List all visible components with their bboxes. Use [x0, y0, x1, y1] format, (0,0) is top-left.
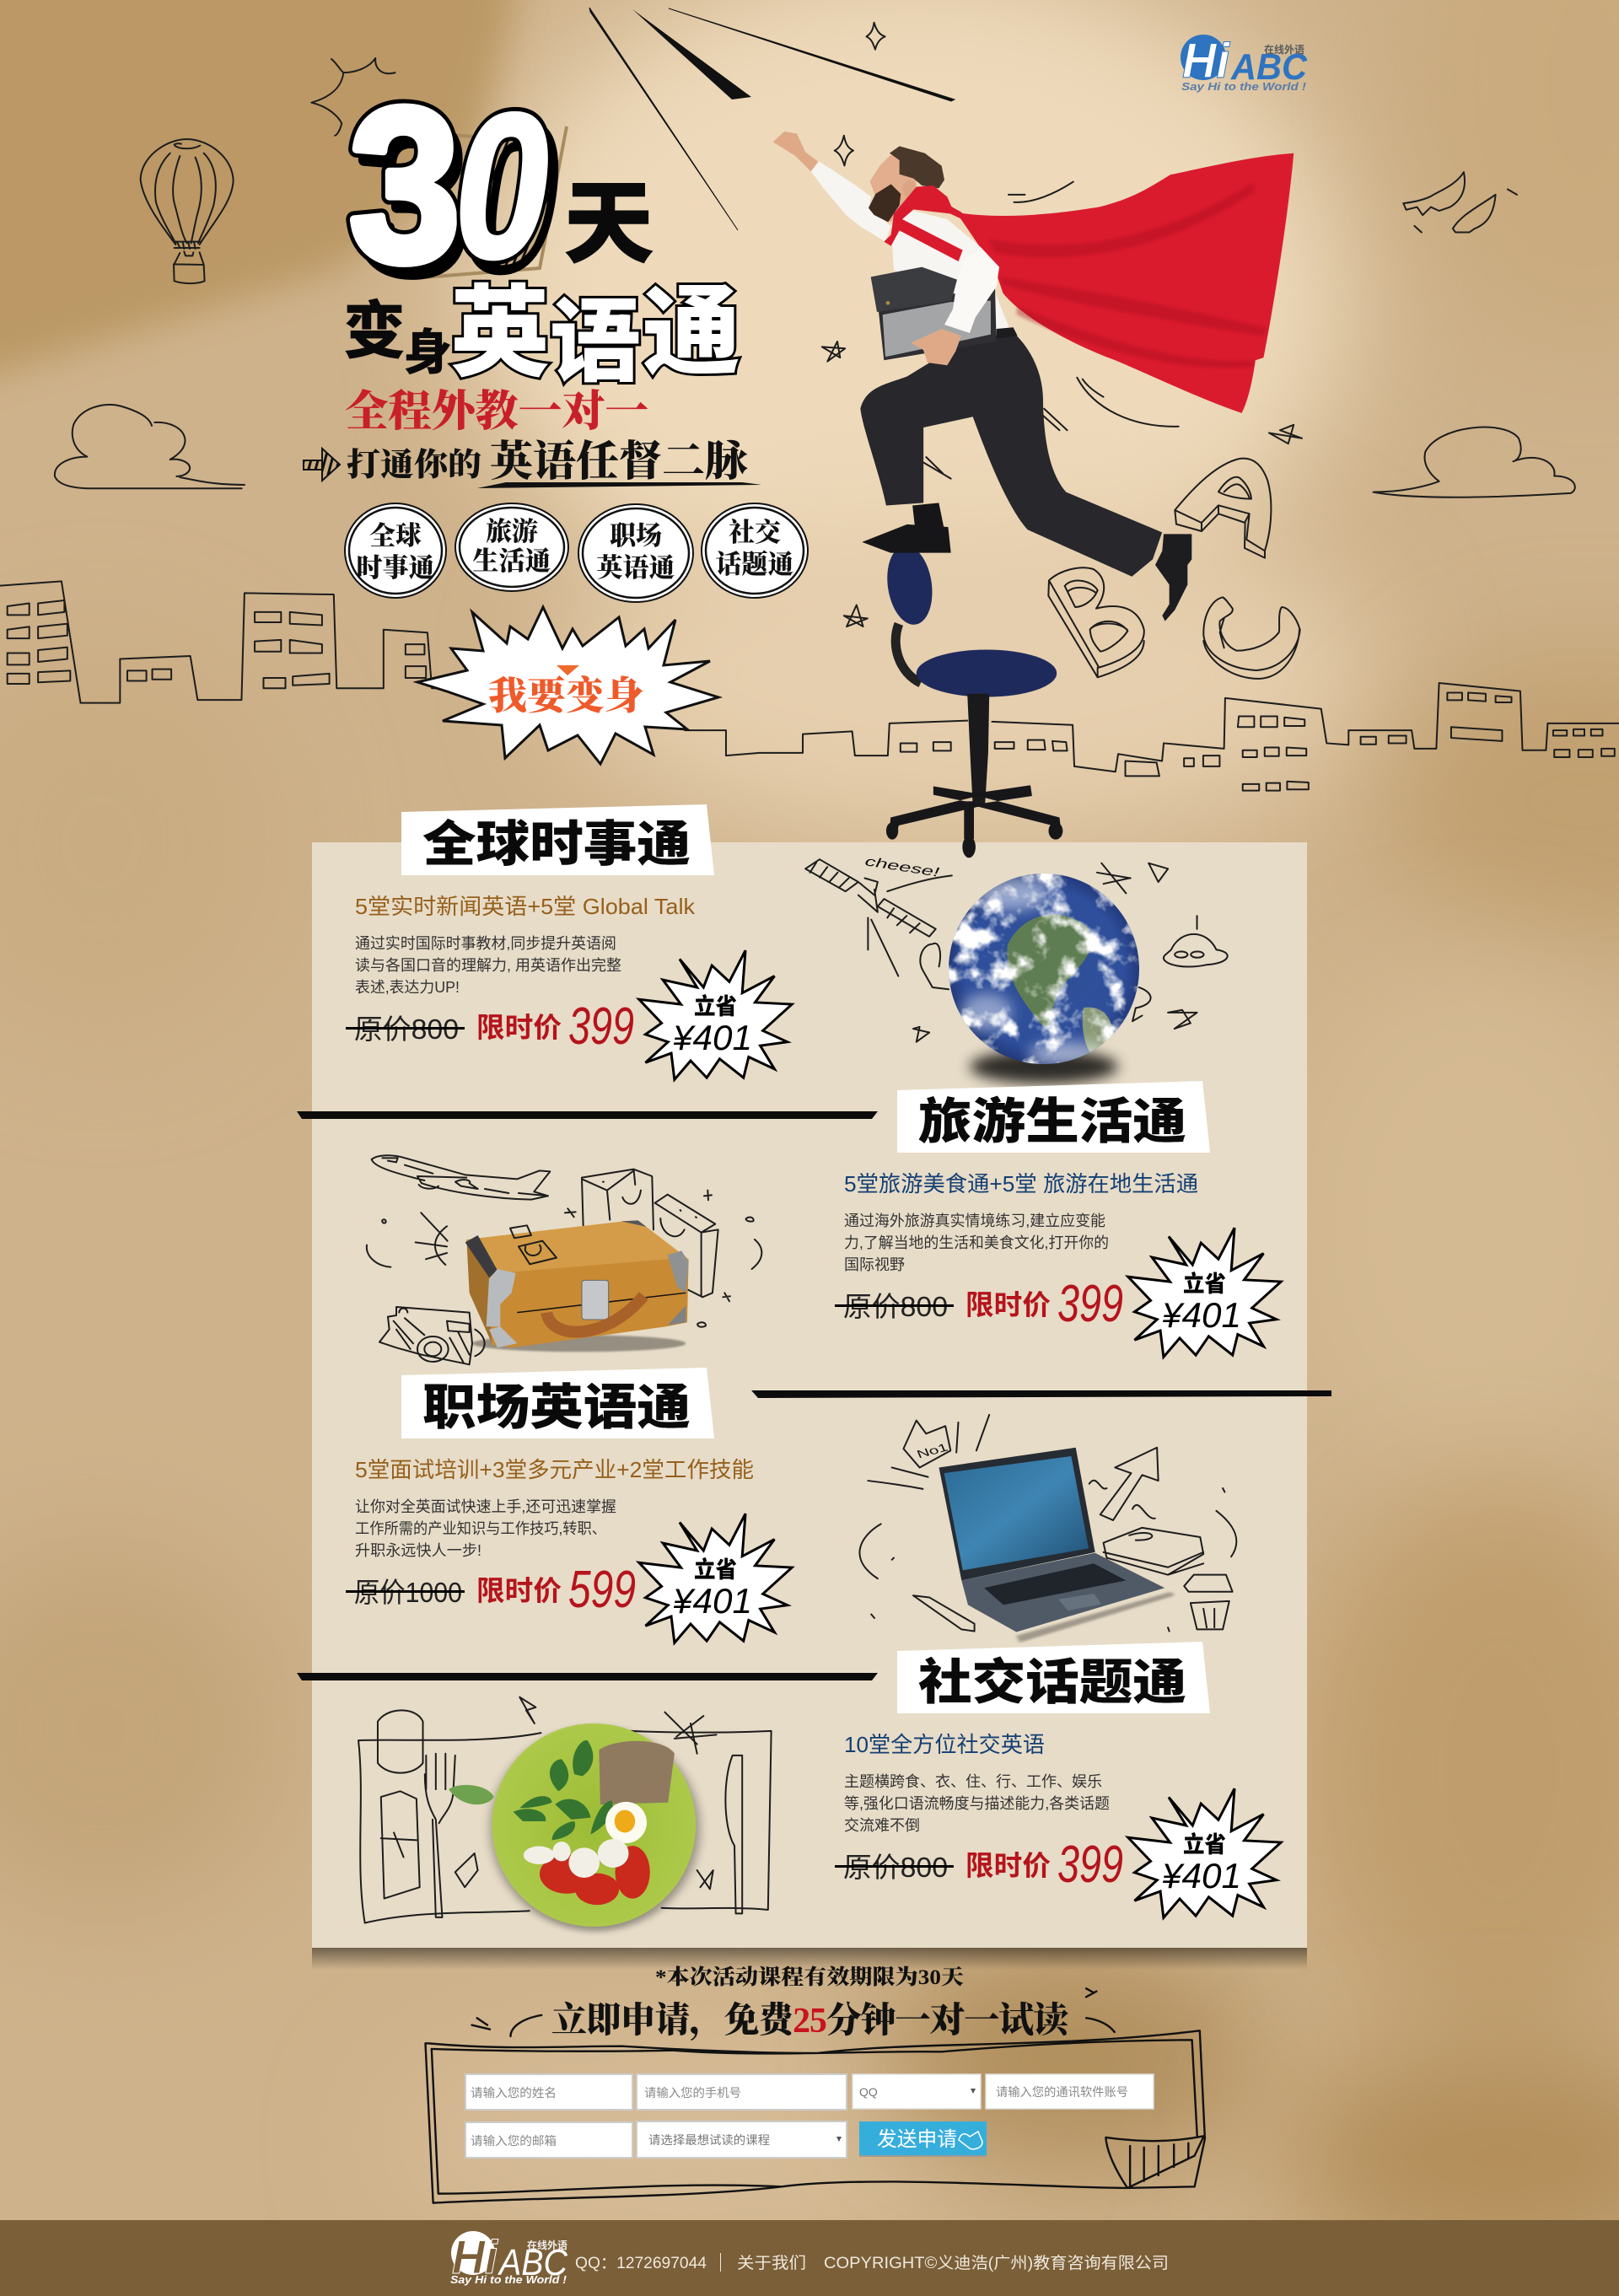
title: 30: 0 — [441, 71, 567, 302]
doodle: letters A B C — [1048, 459, 1300, 679]
tagline: 全程外教一对一: 全程外教一对一 — [345, 388, 648, 436]
form frame sketch — [425, 1988, 1205, 2203]
description: 通过实时国际时事教材,同步提升英语阅 — [355, 935, 616, 952]
logo: Hi ABC top: 在线外语 — [1264, 43, 1304, 56]
price row: 限时价 — [965, 1850, 1051, 1881]
doodles around earth: cheese! — [862, 854, 943, 879]
raised hand — [773, 132, 818, 171]
doodles around earth — [805, 854, 1228, 1042]
logo: Hi ABC top: ABC — [1230, 46, 1308, 88]
title: 30 — [349, 63, 575, 319]
starburst: save 401: 立省 — [1183, 1831, 1226, 1858]
icon: hatched arrow — [304, 449, 340, 481]
label card — [401, 804, 714, 875]
price row: 原价800 — [843, 1291, 948, 1322]
footer text: COPYRIGHT©义迪浩(广州)教育咨询有限公司 — [824, 2254, 1169, 2272]
illustration: laptop with doodles: No1 — [912, 1441, 951, 1460]
button: submit: 发送申请 — [877, 2128, 957, 2151]
panel shadow — [312, 1948, 1307, 1970]
doodle: sun burst behind title — [311, 58, 395, 136]
starburst: save 401 — [1128, 1788, 1281, 1917]
bubble: 社交话题通: 话题通 — [715, 550, 794, 579]
title: 30: 3 — [357, 74, 468, 319]
tagline: 打通你的英语任督二脉: 打通你的 — [347, 448, 481, 483]
footer logo — [450, 2230, 568, 2286]
description: 等,强化口语流畅度与描述能力,各类话题 — [844, 1795, 1110, 1812]
form: email input — [465, 2122, 632, 2158]
divider bar 1 — [297, 1111, 878, 1119]
bubble: 全球时事通: 时事通 — [356, 553, 435, 583]
description — [844, 1773, 1110, 1834]
description: 升职永远快人一步! — [355, 1542, 481, 1559]
raised sleeve — [811, 162, 891, 242]
starburst: save 401 — [639, 950, 792, 1079]
logo: Hi ABC top — [1181, 34, 1308, 93]
starburst: save 401 — [1128, 1228, 1281, 1357]
belt — [997, 327, 1018, 339]
heading: apply now: 立即申请，免费25分钟一对一试读 — [551, 2001, 1070, 2041]
footer text: QQ：1272697044 — [575, 2255, 707, 2272]
footer bar — [0, 2220, 1619, 2296]
tagline: 打通你的英语任督二脉 — [347, 438, 761, 488]
cape — [956, 153, 1294, 413]
form: course select — [637, 2121, 847, 2158]
hero figure: flying man with cape — [860, 153, 1294, 858]
item: 职场英语通 — [346, 1368, 792, 1643]
title: 变身: 变 — [343, 296, 406, 366]
footer logo: Say Hi to the World ! — [450, 2273, 567, 2286]
price row: 399 — [568, 997, 634, 1056]
price row: 399 — [1057, 1275, 1123, 1333]
item: 旅游生活通 — [835, 1081, 1281, 1357]
footer logo: Hi — [452, 2230, 498, 2283]
title: 30: 0 — [441, 71, 567, 302]
description: 国际视野 — [844, 1256, 905, 1273]
form: account input: 请输入您的通讯软件账号 — [996, 2085, 1128, 2099]
form: phone input — [637, 2074, 847, 2110]
suitcase — [465, 1220, 689, 1347]
label card — [897, 1642, 1210, 1713]
form: name input — [465, 2074, 632, 2110]
form: email input: 请输入您的邮箱 — [471, 2134, 557, 2148]
description: 通过海外旅游真实情境练习,建立应变能 — [844, 1213, 1105, 1229]
title: 天: 天 — [563, 173, 654, 275]
price row — [835, 1275, 1123, 1333]
title: 30: 3 — [349, 63, 460, 308]
price row — [346, 1561, 636, 1619]
tagline: 打通你的英语任督二脉: 英语任督二脉 — [490, 438, 748, 485]
trousers — [860, 331, 1162, 577]
bubble: 职场英语通: 职场 — [610, 521, 662, 551]
subheading: 5堂旅游美食通+5堂 旅游在地生活通 — [844, 1171, 1198, 1196]
title: 30: 0 — [449, 82, 575, 313]
starburst: save 401: 立省 — [694, 1557, 737, 1583]
hero figure: upper body — [773, 132, 1018, 365]
doodle: hot air balloon and left cloud — [55, 139, 245, 488]
bubble: 社交话题通 — [702, 503, 808, 598]
divider bar 3 — [297, 1673, 878, 1680]
description: 主题横跨食、衣、住、行、工作、娱乐 — [844, 1773, 1102, 1790]
description: 读与各国口音的理解力, 用英语作出完整 — [355, 957, 621, 974]
form: QQ select: QQ — [859, 2085, 878, 2099]
title: 英语通: 语 — [550, 291, 641, 393]
starburst: save 401: ¥401 — [673, 1018, 752, 1057]
price row: 限时价 — [476, 1012, 562, 1043]
footer logo: ABC — [497, 2242, 568, 2283]
form: phone input: 请输入您的手机号 — [644, 2086, 741, 2100]
label card: 社交话题通 — [918, 1655, 1186, 1710]
starburst: save 401: ¥401 — [673, 1581, 752, 1621]
description: 让你对全英面试快速上手,还可迅速掌握 — [355, 1498, 616, 1515]
title: 英语通: 通 — [643, 277, 740, 387]
logo: Hi ABC top: Hi — [1182, 34, 1231, 89]
footer text — [575, 2253, 1169, 2272]
bubble: 旅游生活通: 生活通 — [472, 546, 551, 576]
logo: Hi ABC top: Say Hi to the World ! — [1181, 80, 1307, 93]
item: 全球时事通 — [346, 804, 792, 1079]
divider bar 2 — [751, 1390, 1331, 1398]
chair — [882, 543, 1062, 858]
price row: 限时价 — [476, 1575, 562, 1606]
price row: 原价1000 — [354, 1577, 462, 1608]
shoes and socks — [862, 503, 951, 553]
description — [844, 1213, 1109, 1273]
speed lines — [589, 8, 955, 230]
description: 力,了解当地的生活和美食文化,打开你的 — [844, 1234, 1109, 1251]
doodles: left skyline — [0, 581, 446, 703]
subheading: 10堂全方位社交英语 — [844, 1732, 1045, 1757]
illustration: laptop with doodles — [859, 1415, 1236, 1643]
bubble: 职场英语通 — [578, 504, 693, 602]
bubble: 全球时事通: 全球 — [369, 521, 422, 551]
hero figure: rear shoe — [1155, 534, 1191, 621]
price row — [346, 997, 634, 1056]
label card: 旅游生活通 — [918, 1094, 1186, 1149]
subheading: 5堂面试培训+3堂多元产业+2堂工作技能 — [355, 1457, 754, 1482]
note: validity: *本次活动课程有效期限为30天 — [655, 1965, 964, 1989]
starburst: save 401: 立省 — [694, 993, 737, 1019]
footer logo: 在线外语 — [527, 2239, 567, 2251]
label card: 职场英语通 — [422, 1380, 691, 1435]
price row: 原价800 — [843, 1852, 948, 1883]
scarf and strap — [884, 186, 974, 261]
forearm and hand — [911, 250, 999, 365]
subheading: 5堂实时新闻英语+5堂 Global Talk — [355, 894, 696, 919]
starburst button: 我要变身 — [417, 607, 718, 764]
bubble: 社交话题通: 社交 — [729, 518, 782, 547]
doodles: plane and shopping bags — [367, 1155, 761, 1327]
starburst: save 401: ¥401 — [1162, 1295, 1241, 1335]
form: QQ select — [853, 2074, 981, 2109]
label card: 全球时事通 — [422, 817, 691, 872]
price row: 599 — [568, 1561, 636, 1619]
price row: 399 — [1057, 1836, 1123, 1894]
doodle: sticker and camera — [379, 1225, 557, 1364]
bag — [871, 267, 997, 360]
shirt — [891, 211, 1009, 331]
form: course select: 请选择最想试读的课程 — [648, 2133, 770, 2147]
bubble: 旅游生活通 — [455, 503, 568, 591]
item: 社交话题通 — [835, 1642, 1281, 1917]
price row: 限时价 — [965, 1289, 1051, 1320]
head — [869, 146, 944, 222]
starburst: save 401 — [639, 1514, 792, 1643]
illustration: food plate on placemat — [358, 1697, 772, 1931]
illustration: earth — [944, 868, 1147, 1083]
starburst: save 401: 立省 — [1183, 1271, 1226, 1297]
price row — [835, 1836, 1123, 1894]
footer text: 关于我们 — [737, 2254, 806, 2272]
title: 英语通: 英 — [450, 278, 550, 390]
title: 英语通 — [450, 277, 740, 393]
bubble: 职场英语通: 英语通 — [597, 553, 675, 583]
title: 变身 — [343, 296, 452, 380]
description: 表述,表达力UP! — [355, 979, 460, 996]
bubble: 全球时事通 — [345, 503, 446, 598]
doodles: right skyline, clouds, birds, stars and motion marks — [685, 23, 1619, 791]
illustration: suitcase with plane, bags and camera — [367, 1155, 761, 1364]
panel: courses background — [312, 842, 1307, 1948]
bubble: 旅游生活通: 旅游 — [486, 517, 538, 546]
title: 变身: 身 — [403, 325, 452, 380]
starburst: save 401: ¥401 — [1162, 1856, 1241, 1895]
starburst button: 我要变身: 我要变身 — [488, 675, 643, 718]
title: 30: 3 — [349, 63, 460, 308]
label card — [401, 1368, 714, 1438]
description: 工作所需的产业知识与工作技巧,转职、 — [355, 1520, 606, 1537]
button: submit — [859, 2121, 987, 2157]
description: 交流难不倒 — [844, 1817, 920, 1834]
label card — [897, 1081, 1210, 1153]
form: account input — [986, 2074, 1154, 2109]
price row: 原价800 — [354, 1014, 459, 1045]
description — [355, 935, 621, 996]
description — [355, 1498, 616, 1559]
form: name input: 请输入您的姓名 — [471, 2086, 557, 2100]
